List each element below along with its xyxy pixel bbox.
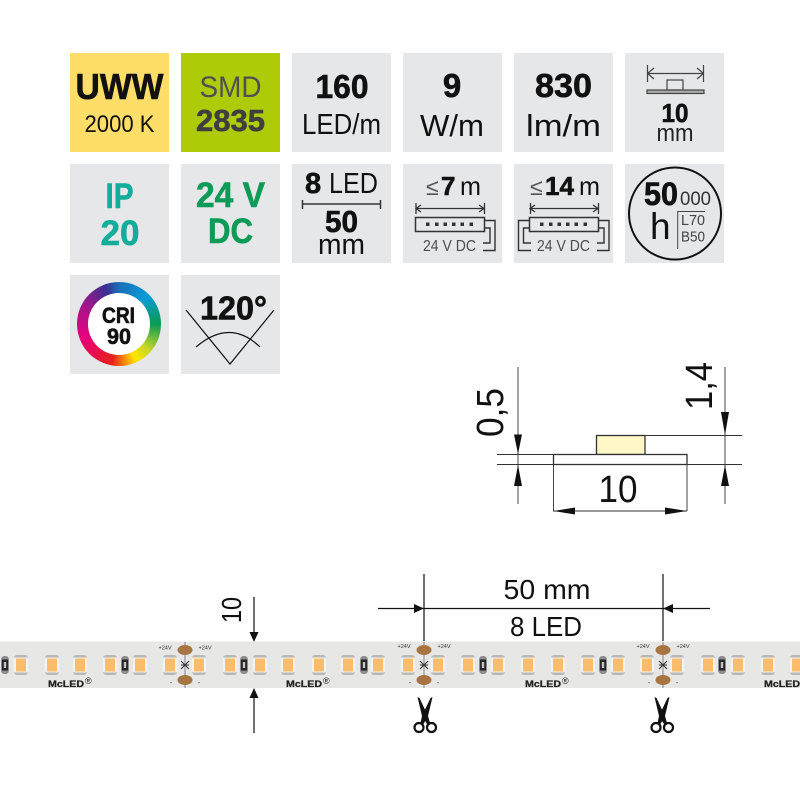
tile: 8 LED per 50 mm [292,164,391,263]
pad labels: - [676,680,679,687]
dimension 10: 10 [598,469,638,511]
segment dimension: 50 mm, 8 LED [378,574,710,642]
pad labels: +24V [438,644,451,650]
pad labels: - [437,680,440,687]
McLED logos: ® [85,676,92,686]
tile: beam angle 120° [181,275,280,374]
tile: CRI 90 [70,275,169,374]
tile: IP 20 [70,164,169,263]
tile: UWW 2000 K [70,53,169,152]
LED strip photo [0,642,800,689]
tile: 8 LED per 50 mm: 8 [305,168,321,200]
pad labels: +24V [158,646,172,652]
strip width dimension: 10: 10 [216,597,247,623]
McLED logos: McLED [764,679,800,689]
icon: scissors left [414,697,436,732]
pad labels: +24V [636,644,650,650]
McLED logos: McLED [286,679,323,689]
pad labels: +24V [398,644,411,650]
tile: max 7 m run [403,164,502,263]
tile: max 14 m run: 14 [545,171,575,201]
pad labels [158,644,690,687]
McLED logos: McLED [48,679,85,689]
tile: max 7 m run: 24 V DC [423,238,476,255]
tile: SMD 2835 [181,53,280,152]
cross-section dimension drawing [470,362,742,514]
strip board profile [554,454,687,464]
pad labels: - [409,680,412,687]
tile: width 10 mm: mm [656,120,694,147]
pad labels: - [198,680,201,687]
tile: lifetime 50000 h [625,164,724,263]
LED chips [14,655,800,675]
tile: max 14 m run: 24 V DC [537,238,590,255]
dimension 0,5: 0,5 [470,388,512,437]
tile: max 14 m run [514,164,613,263]
pad labels: - [170,680,173,687]
McLED logos: ® [562,676,569,686]
McLED logos: ® [323,676,330,686]
resistors [1,656,726,674]
tile: 8 LED per 50 mm: mm [318,229,365,261]
strip width dimension: 10 [216,597,258,733]
dimension 1,4: 1,4 [679,362,721,410]
tile: SMD 2835: 2835 [196,103,265,138]
tile: max 14 m run: m [579,171,600,201]
tile: width 10 mm: 10 [662,98,688,128]
McLED logos: McLED [525,679,562,689]
tile: CRI 90: CRI [102,303,135,328]
LED package profile [596,436,645,454]
icon: scissors right [652,697,673,732]
tile: 9 W/m: 9 [443,67,461,104]
tile: lifetime 50000 h: h [650,206,671,247]
tile: max 14 m run: ≤ [530,174,543,200]
tile: UWW 2000 K: UWW [76,66,164,107]
tile: lifetime 50000 h: 000 [680,189,711,210]
tile: 160 LED/m: LED/m [302,109,381,141]
label: 50 mm: 50 mm [504,574,590,605]
tile: IP 20: IP [106,177,134,216]
tile: lifetime 50000 h: B50 [681,228,705,246]
tile: IP 20: 20 [100,214,140,253]
tile: 8 LED per 50 mm: 50 [325,204,358,239]
tile: 9 W/m: W/m [420,108,484,143]
pad labels: +24V [198,646,212,652]
tile: 9 W/m [403,53,502,152]
McLED logos [48,676,800,689]
tile: 24 V DC: DC [208,212,253,251]
tile: SMD 2835: SMD [200,71,262,104]
tile: 830 lm/m: 830 [535,67,592,104]
tile: 830 lm/m: lm/m [526,108,601,143]
tile: 24 V DC [181,164,280,263]
tile: max 7 m run: 7 [441,171,455,201]
tile: 830 lm/m [514,53,613,152]
tile: 160 LED/m [292,53,391,152]
pad labels: +24V [676,644,690,650]
tile: max 7 m run: m [460,171,481,201]
tile: beam angle 120°: 120° [200,290,267,326]
tile: CRI 90: 90 [107,324,131,349]
label: 8 LED: 8 LED [510,611,582,642]
tile: width 10 mm [625,53,724,152]
tile: lifetime 50000 h: L70 [681,212,705,229]
tile: max 7 m run: ≤ [426,174,439,200]
cut points with solder pads [178,642,670,688]
tile: 24 V DC: 24 V [196,176,266,215]
tile: 160 LED/m: 160 [316,68,368,105]
tile: UWW 2000 K: 2000 K [84,111,154,138]
tile: 8 LED per 50 mm: LED [329,168,378,200]
pad labels: - [648,680,651,687]
tile: lifetime 50000 h: 50 [644,176,678,212]
